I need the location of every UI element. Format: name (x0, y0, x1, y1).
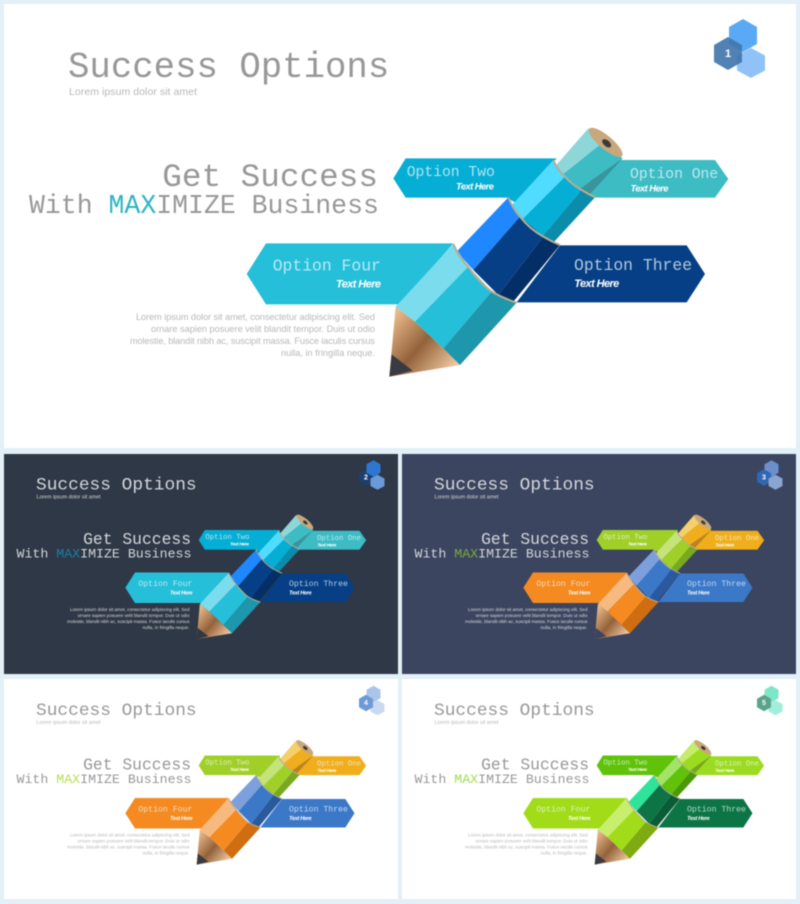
option four label: Text Here (336, 279, 381, 291)
text block: description: nulla, in fringilla neque. (142, 625, 190, 630)
text block: description: molestie, blandit nibh ac, suscipit massa. Fusce iaculis cursus (465, 844, 588, 849)
title: Success Options (68, 47, 389, 88)
option four label: Option Four (138, 579, 192, 589)
option four label: Option Four (138, 805, 192, 815)
option two label (205, 759, 249, 772)
option two label: Option Two (407, 165, 495, 181)
option two label: Option Two (603, 534, 647, 542)
text block: description: ornare sapien posuere velit blandit tempor. Duis ut odio (78, 613, 190, 618)
option three label: Text Here (574, 278, 619, 290)
option one label (715, 760, 759, 773)
text block: description: ornare sapien posuere velit blandit tempor. Duis ut odio (78, 838, 190, 843)
subtitle: Lorem ipsum dolor sit amet (434, 494, 499, 500)
option three label: Option Three (289, 579, 348, 589)
heading: get success: Get Success (481, 755, 589, 774)
text block: description: nulla, in fringilla neque. (142, 850, 190, 855)
option two label: Option Two (205, 534, 249, 542)
option two label (603, 534, 647, 547)
option two label (205, 534, 249, 547)
ribbons and pencil graphic (125, 738, 366, 865)
text block: description (130, 312, 375, 358)
text block: description: Lorem ipsum dolor sit amet, consectetur adipiscing elit. Sed (70, 832, 190, 837)
option two label: Option Two (603, 759, 647, 767)
icon: hexagon cluster 5: 5 (762, 700, 766, 707)
text block: description: Lorem ipsum dolor sit amet, consectetur adipiscing elit. Sed (468, 607, 588, 612)
panel: slide 3 navy with orange theme (402, 454, 796, 674)
panel: slide 5 white with green theme (402, 679, 796, 899)
option one label: Text Here (317, 543, 337, 548)
option one label: Option One (715, 535, 759, 543)
icon: hexagon cluster 1: 1 (725, 48, 731, 60)
option three label: Text Here (289, 590, 312, 596)
text block: description (67, 607, 190, 630)
text block: description: Lorem ipsum dolor sit amet, consectetur adipiscing elit. Sed (70, 607, 190, 612)
text block: description: ornare sapien posuere velit blandit tempor. Duis ut odio (476, 838, 588, 843)
option three label (289, 804, 348, 822)
icon: hexagon cluster 3: 3 (762, 474, 766, 481)
option three label: Text Here (687, 816, 710, 822)
text block: description: nulla, in fringilla neque. (540, 625, 588, 630)
option one label: Option One (715, 760, 759, 768)
option four label (273, 257, 381, 291)
option two label: Option Two (205, 759, 249, 767)
heading: get success: Get Success (162, 159, 378, 196)
title: Success Options (36, 701, 197, 721)
panel: slide 1 large blue on white (4, 4, 796, 448)
icon: hexagon cluster 2: 2 (364, 474, 368, 481)
option two label: Text Here (230, 767, 249, 772)
option four label: Text Here (170, 816, 192, 822)
title: Success Options (36, 475, 197, 495)
ribbons and pencil graphic (523, 513, 764, 639)
icon: hexagon cluster 1 (714, 19, 765, 78)
heading: get success: Get Success (481, 530, 589, 549)
ribbons and pencil graphic (125, 513, 366, 639)
subtitle: Lorem ipsum dolor sit amet (69, 86, 197, 98)
icon: hexagon cluster 3 (757, 460, 782, 490)
option one label (317, 535, 361, 548)
panel: slide 4 white with orange theme (4, 679, 398, 899)
text block: description: nulla, in fringilla neque. (281, 348, 375, 358)
option three label: Option Three (289, 804, 348, 814)
text block: description: molestie, blandit nibh ac, suscipit massa. Fusce iaculis cursus (130, 336, 375, 346)
panel: slide 2 dark slate blue (4, 454, 398, 674)
text block: description: molestie, blandit nibh ac, suscipit massa. Fusce iaculis cursus (67, 844, 190, 849)
option three label (574, 256, 692, 290)
option four label: Text Here (568, 816, 590, 822)
heading: with maximize business: With MAXIMIZE Business (29, 191, 379, 221)
text block: description: Lorem ipsum dolor sit amet, consectetur adipiscing elit. Sed (136, 312, 375, 322)
option one label (630, 167, 718, 194)
option one label: Option One (317, 535, 361, 543)
option two label (603, 759, 647, 772)
option one label (715, 535, 759, 548)
option three label: Option Three (687, 579, 746, 589)
option two label: Text Here (628, 767, 647, 772)
text block: description (67, 832, 190, 855)
option one label (317, 760, 361, 773)
option one label: Text Here (317, 768, 337, 773)
option four label: Option Four (536, 579, 590, 589)
subtitle: Lorem ipsum dolor sit amet (36, 720, 101, 726)
option three label: Text Here (289, 816, 312, 822)
option three label (289, 579, 348, 596)
option two label (407, 165, 495, 192)
text block: description: nulla, in fringilla neque. (540, 850, 588, 855)
option four label (536, 805, 590, 822)
icon: hexagon cluster 4 (359, 686, 384, 715)
ribbons and pencil graphic (247, 124, 728, 377)
option one label: Option One (317, 760, 361, 768)
heading: with maximize business: With MAXIMIZE Business (414, 772, 589, 787)
option one label: Option One (630, 167, 718, 183)
option one label: Text Here (715, 543, 735, 548)
heading: get success: Get Success (83, 755, 191, 774)
option four label (536, 579, 590, 597)
text block: description (465, 832, 588, 855)
icon: hexagon cluster 2 (359, 460, 384, 490)
heading: with maximize business: With MAXIMIZE Business (16, 546, 191, 561)
icon: hexagon cluster 4: 4 (364, 700, 368, 707)
option two label: Text Here (456, 180, 494, 192)
text block: description (465, 607, 588, 630)
title: Success Options (434, 701, 595, 721)
ribbons and pencil graphic (523, 738, 764, 865)
option three label (687, 579, 746, 596)
option four label: Text Here (170, 591, 192, 597)
text block: description: molestie, blandit nibh ac, suscipit massa. Fusce iaculis cursus (465, 619, 588, 624)
heading: with maximize business: With MAXIMIZE Business (16, 772, 191, 787)
text block: description: molestie, blandit nibh ac, suscipit massa. Fusce iaculis cursus (67, 619, 190, 624)
option three label: Option Three (574, 256, 692, 275)
option three label (687, 804, 746, 822)
text block: description: ornare sapien posuere velit blandit tempor. Duis ut odio (476, 613, 588, 618)
subtitle: Lorem ipsum dolor sit amet (36, 494, 101, 500)
option three label: Option Three (687, 804, 746, 814)
heading: with maximize business: With MAXIMIZE Business (414, 546, 589, 561)
option four label (138, 579, 192, 597)
option four label: Text Here (568, 591, 590, 597)
option three label: Text Here (687, 590, 710, 596)
text block: description: ornare sapien posuere velit blandit tempor. Duis ut odio (151, 324, 375, 334)
option one label: Text Here (630, 182, 668, 194)
option four label (138, 805, 192, 822)
option four label: Option Four (536, 805, 590, 815)
heading: get success: Get Success (83, 530, 191, 549)
option one label: Text Here (715, 768, 735, 773)
subtitle: Lorem ipsum dolor sit amet (434, 720, 499, 726)
title: Success Options (434, 475, 595, 495)
option two label: Text Here (628, 542, 647, 547)
option two label: Text Here (230, 542, 249, 547)
option four label: Option Four (273, 257, 381, 276)
text block: description: Lorem ipsum dolor sit amet, consectetur adipiscing elit. Sed (468, 832, 588, 837)
icon: hexagon cluster 5 (757, 686, 782, 715)
